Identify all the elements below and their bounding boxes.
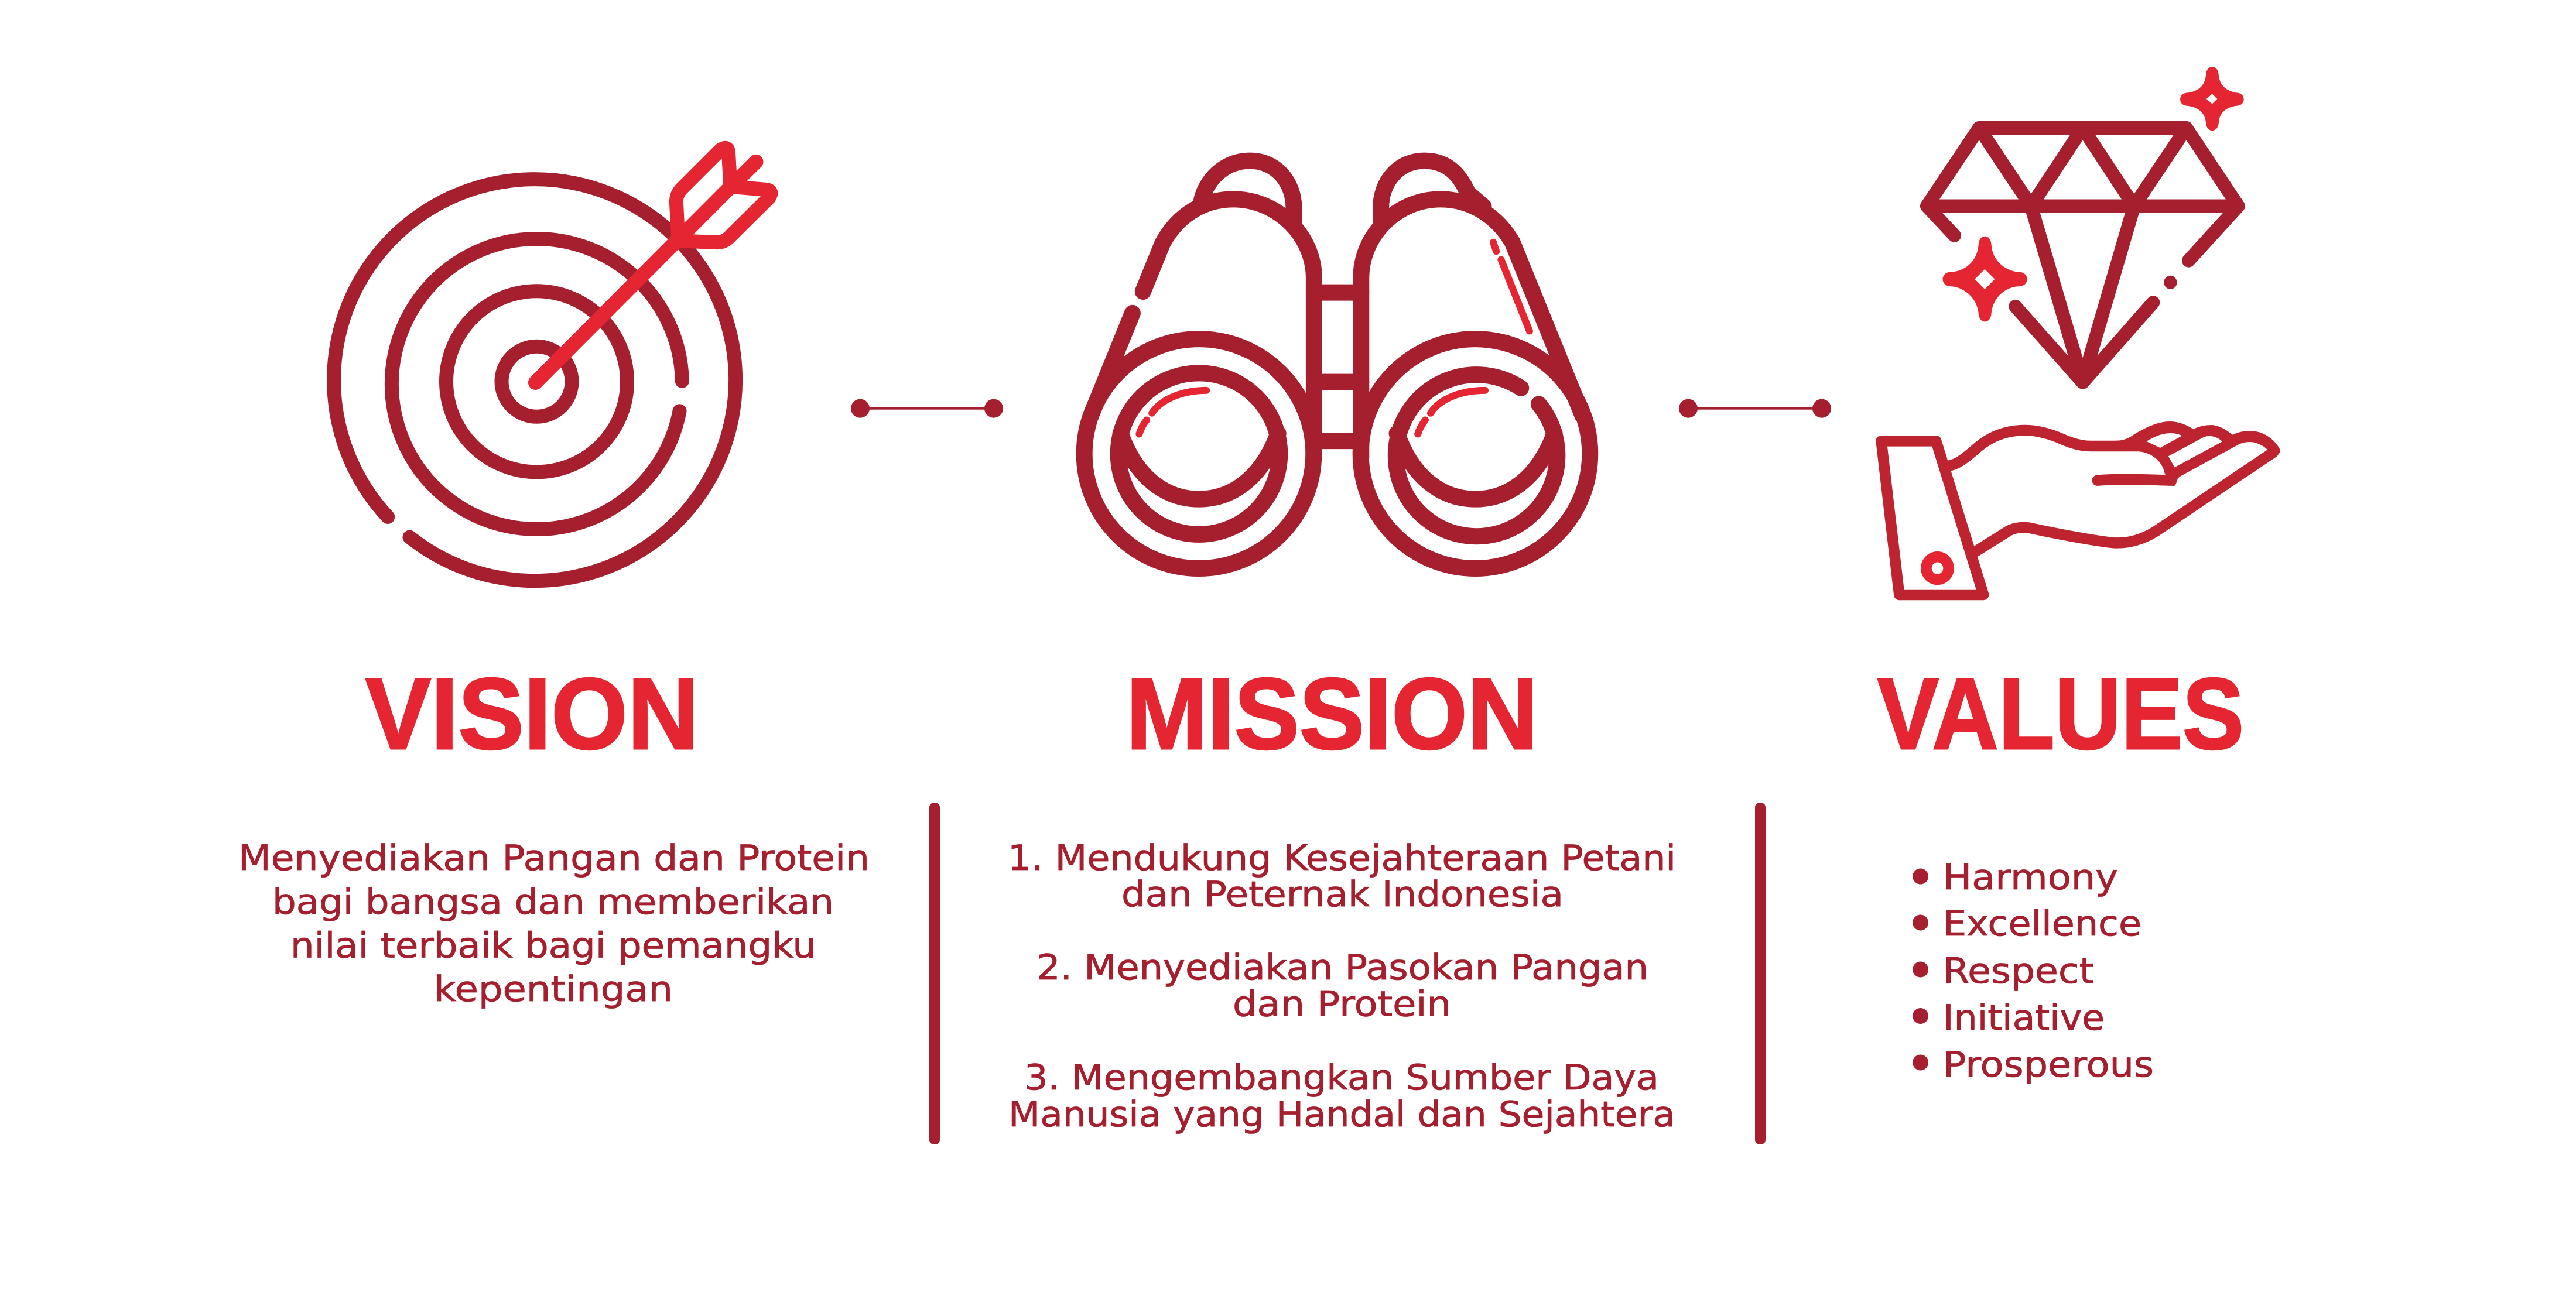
hand and cuff	[1881, 430, 2273, 595]
lens highlights	[1139, 242, 1530, 434]
text block: vision statement: kepentingan	[434, 969, 673, 1010]
list: values: Harmony	[1943, 857, 2118, 898]
text block: mission statements: dan Peternak Indonesia	[1121, 874, 1564, 915]
sparkle: large	[1943, 237, 2027, 321]
list: values: Excellence	[1943, 903, 2141, 944]
heading: vision: VISION	[365, 657, 699, 770]
diamond	[1927, 128, 2238, 382]
sparkle: small	[2180, 67, 2244, 131]
icon: target with arrow	[334, 148, 771, 581]
connector: mission to values	[1679, 399, 1831, 418]
list: values: Prosperous	[1943, 1044, 2154, 1085]
text block: mission statements: 2. Menyediakan Pasokan Pangan	[1036, 947, 1648, 988]
icon: diamond with sparkles	[1927, 67, 2244, 382]
text block: vision statement: Menyediakan Pangan dan Protein	[238, 838, 870, 879]
cuff button	[1926, 557, 1949, 580]
text block: mission statements: Manusia yang Handal dan Sejahtera	[1008, 1094, 1675, 1135]
icon: open hand	[1881, 421, 2280, 595]
text block: mission statements: 1. Mendukung Kesejahteraan Petani	[1008, 838, 1676, 879]
heading: mission: MISSION	[1126, 657, 1538, 770]
connector: vision to mission	[851, 399, 1003, 418]
diamond dot	[2164, 276, 2177, 289]
list: values: Respect	[1943, 951, 2094, 992]
arrow	[535, 148, 771, 382]
list: values: Initiative	[1943, 998, 2105, 1039]
icon: binoculars	[1085, 161, 1590, 568]
text block: vision statement: bagi bangsa dan memberikan	[272, 882, 834, 923]
text block: vision statement: nilai terbaik bagi pemangku	[290, 926, 816, 967]
text block: vision statement	[238, 838, 870, 1010]
divider: right	[1755, 803, 1766, 1144]
heading: values: VALUES	[1877, 657, 2244, 770]
text block: mission statements	[1008, 838, 1676, 1135]
binocular body	[1085, 161, 1590, 568]
list: values	[1913, 857, 2154, 1085]
divider: left	[929, 803, 940, 1144]
target rings	[334, 179, 735, 581]
text block: mission statements: 3. Mengembangkan Sumber Daya	[1024, 1057, 1659, 1098]
text block: mission statements: dan Protein	[1233, 983, 1451, 1024]
fingers	[2116, 421, 2280, 486]
